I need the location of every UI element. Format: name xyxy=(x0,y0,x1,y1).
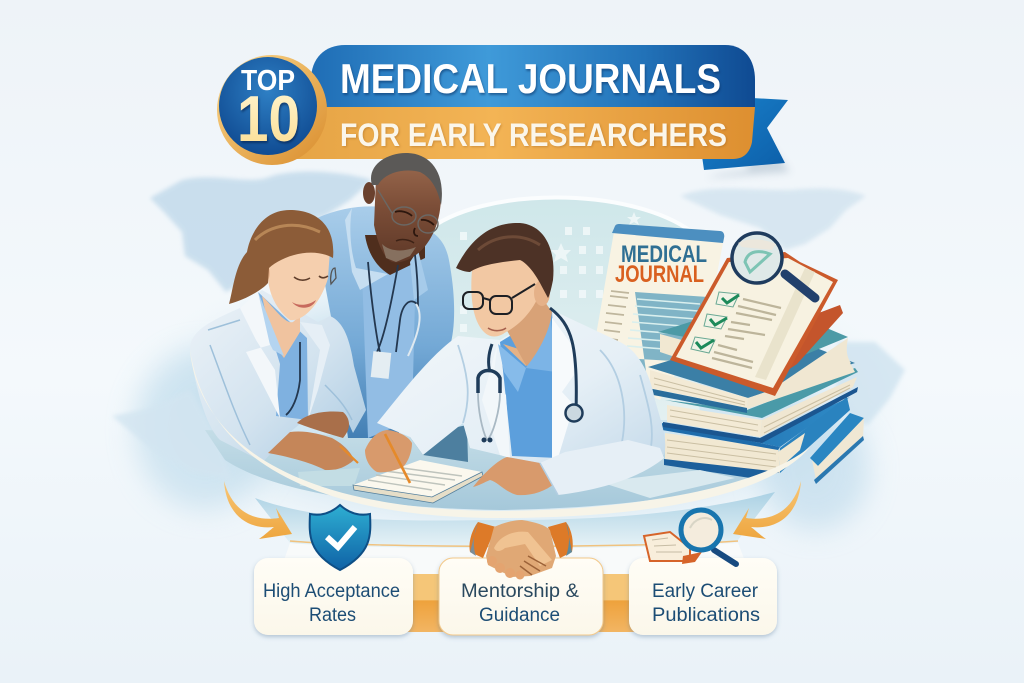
top 10 badge: TOP xyxy=(241,65,295,97)
card: early career publications: Publications xyxy=(652,605,760,626)
card: mentorship and guidance xyxy=(439,558,603,635)
magnifying glass xyxy=(732,233,815,298)
medical journal cover xyxy=(590,224,724,400)
blue upper band xyxy=(311,45,755,107)
orange lower band xyxy=(280,107,755,159)
person: woman researcher xyxy=(190,210,366,470)
icon: handshake xyxy=(469,520,573,580)
journal title: JOURNAL xyxy=(615,261,704,288)
book 4 blue xyxy=(662,397,850,479)
stack of books xyxy=(648,300,864,484)
person: senior doctor xyxy=(317,153,454,438)
orange connector line xyxy=(290,541,738,546)
title banner xyxy=(280,45,790,178)
orange band behind cards xyxy=(405,574,640,632)
card: high acceptance rates: Rates xyxy=(309,605,356,626)
glasses xyxy=(463,284,535,314)
icon: shield with check xyxy=(310,505,370,570)
ribbon tail xyxy=(702,98,790,178)
top 10 badge: 10 xyxy=(237,82,300,155)
young doctor hands and pen xyxy=(365,430,664,495)
platform rim xyxy=(190,350,810,518)
person: young doctor xyxy=(377,223,665,494)
card: mentorship and guidance: Guidance xyxy=(479,605,560,626)
journal title xyxy=(615,241,707,288)
card: high acceptance rates xyxy=(254,558,413,635)
woman arm and hands xyxy=(268,412,358,470)
glasses xyxy=(378,190,438,233)
heading line one: MEDICAL JOURNALS xyxy=(340,55,721,102)
icon: book and magnifier xyxy=(644,510,736,564)
white panel behind cards xyxy=(270,543,760,600)
clipboard checklist xyxy=(670,252,838,396)
stethoscope and badge xyxy=(368,255,420,379)
arrow: left xyxy=(224,481,292,539)
card: early career publications: Early Career xyxy=(652,581,759,602)
arrow: right xyxy=(733,481,801,539)
open notebook on desk xyxy=(353,460,483,503)
book 5 side xyxy=(810,413,864,484)
dome circle behind the team xyxy=(426,198,700,420)
book 3 teal xyxy=(663,368,858,443)
check items xyxy=(691,292,781,368)
book 2 xyxy=(648,330,855,413)
card: mentorship and guidance: Mentorship & xyxy=(461,581,579,602)
card: early career publications xyxy=(629,558,777,635)
world map backdrop xyxy=(112,172,905,480)
dish under platform xyxy=(255,492,775,548)
red book under clipboard xyxy=(785,305,843,372)
book 1 teal xyxy=(658,300,851,394)
heading line two: FOR EARLY RESEARCHERS xyxy=(340,117,727,153)
journal title: MEDICAL xyxy=(621,241,707,268)
stethoscope xyxy=(478,308,582,442)
desk surface xyxy=(205,430,806,510)
top 10 badge xyxy=(217,55,327,165)
card: high acceptance rates: High Acceptance xyxy=(263,581,400,602)
desk papers xyxy=(298,468,735,498)
